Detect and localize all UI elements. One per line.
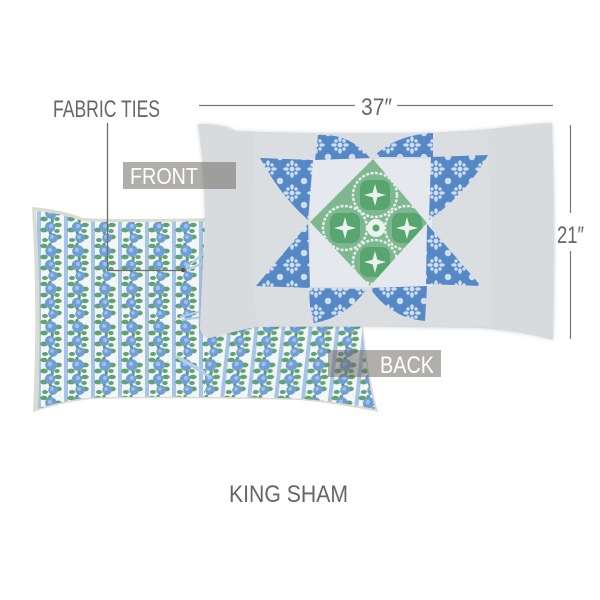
caption: King Sham: KING SHAM <box>229 481 348 508</box>
label: BACK <box>328 350 441 379</box>
callout: fabric ties: FABRIC TIES <box>53 96 160 123</box>
center green diamond <box>310 159 427 286</box>
width dimension: 37 inches: 37″ <box>361 94 392 121</box>
height dimension: 21 inches: 21″ <box>557 222 584 249</box>
label: BACK: BACK <box>380 352 434 379</box>
callout: fabric ties <box>53 96 185 272</box>
quilted inner panel <box>252 133 492 326</box>
label: FRONT: FRONT <box>130 163 198 189</box>
star points <box>256 133 488 323</box>
center square <box>310 159 432 287</box>
label: FRONT <box>123 162 236 189</box>
back pillow sham <box>32 207 378 412</box>
fabric ties on back pillow <box>175 252 212 378</box>
front pillow sham <box>198 123 554 340</box>
